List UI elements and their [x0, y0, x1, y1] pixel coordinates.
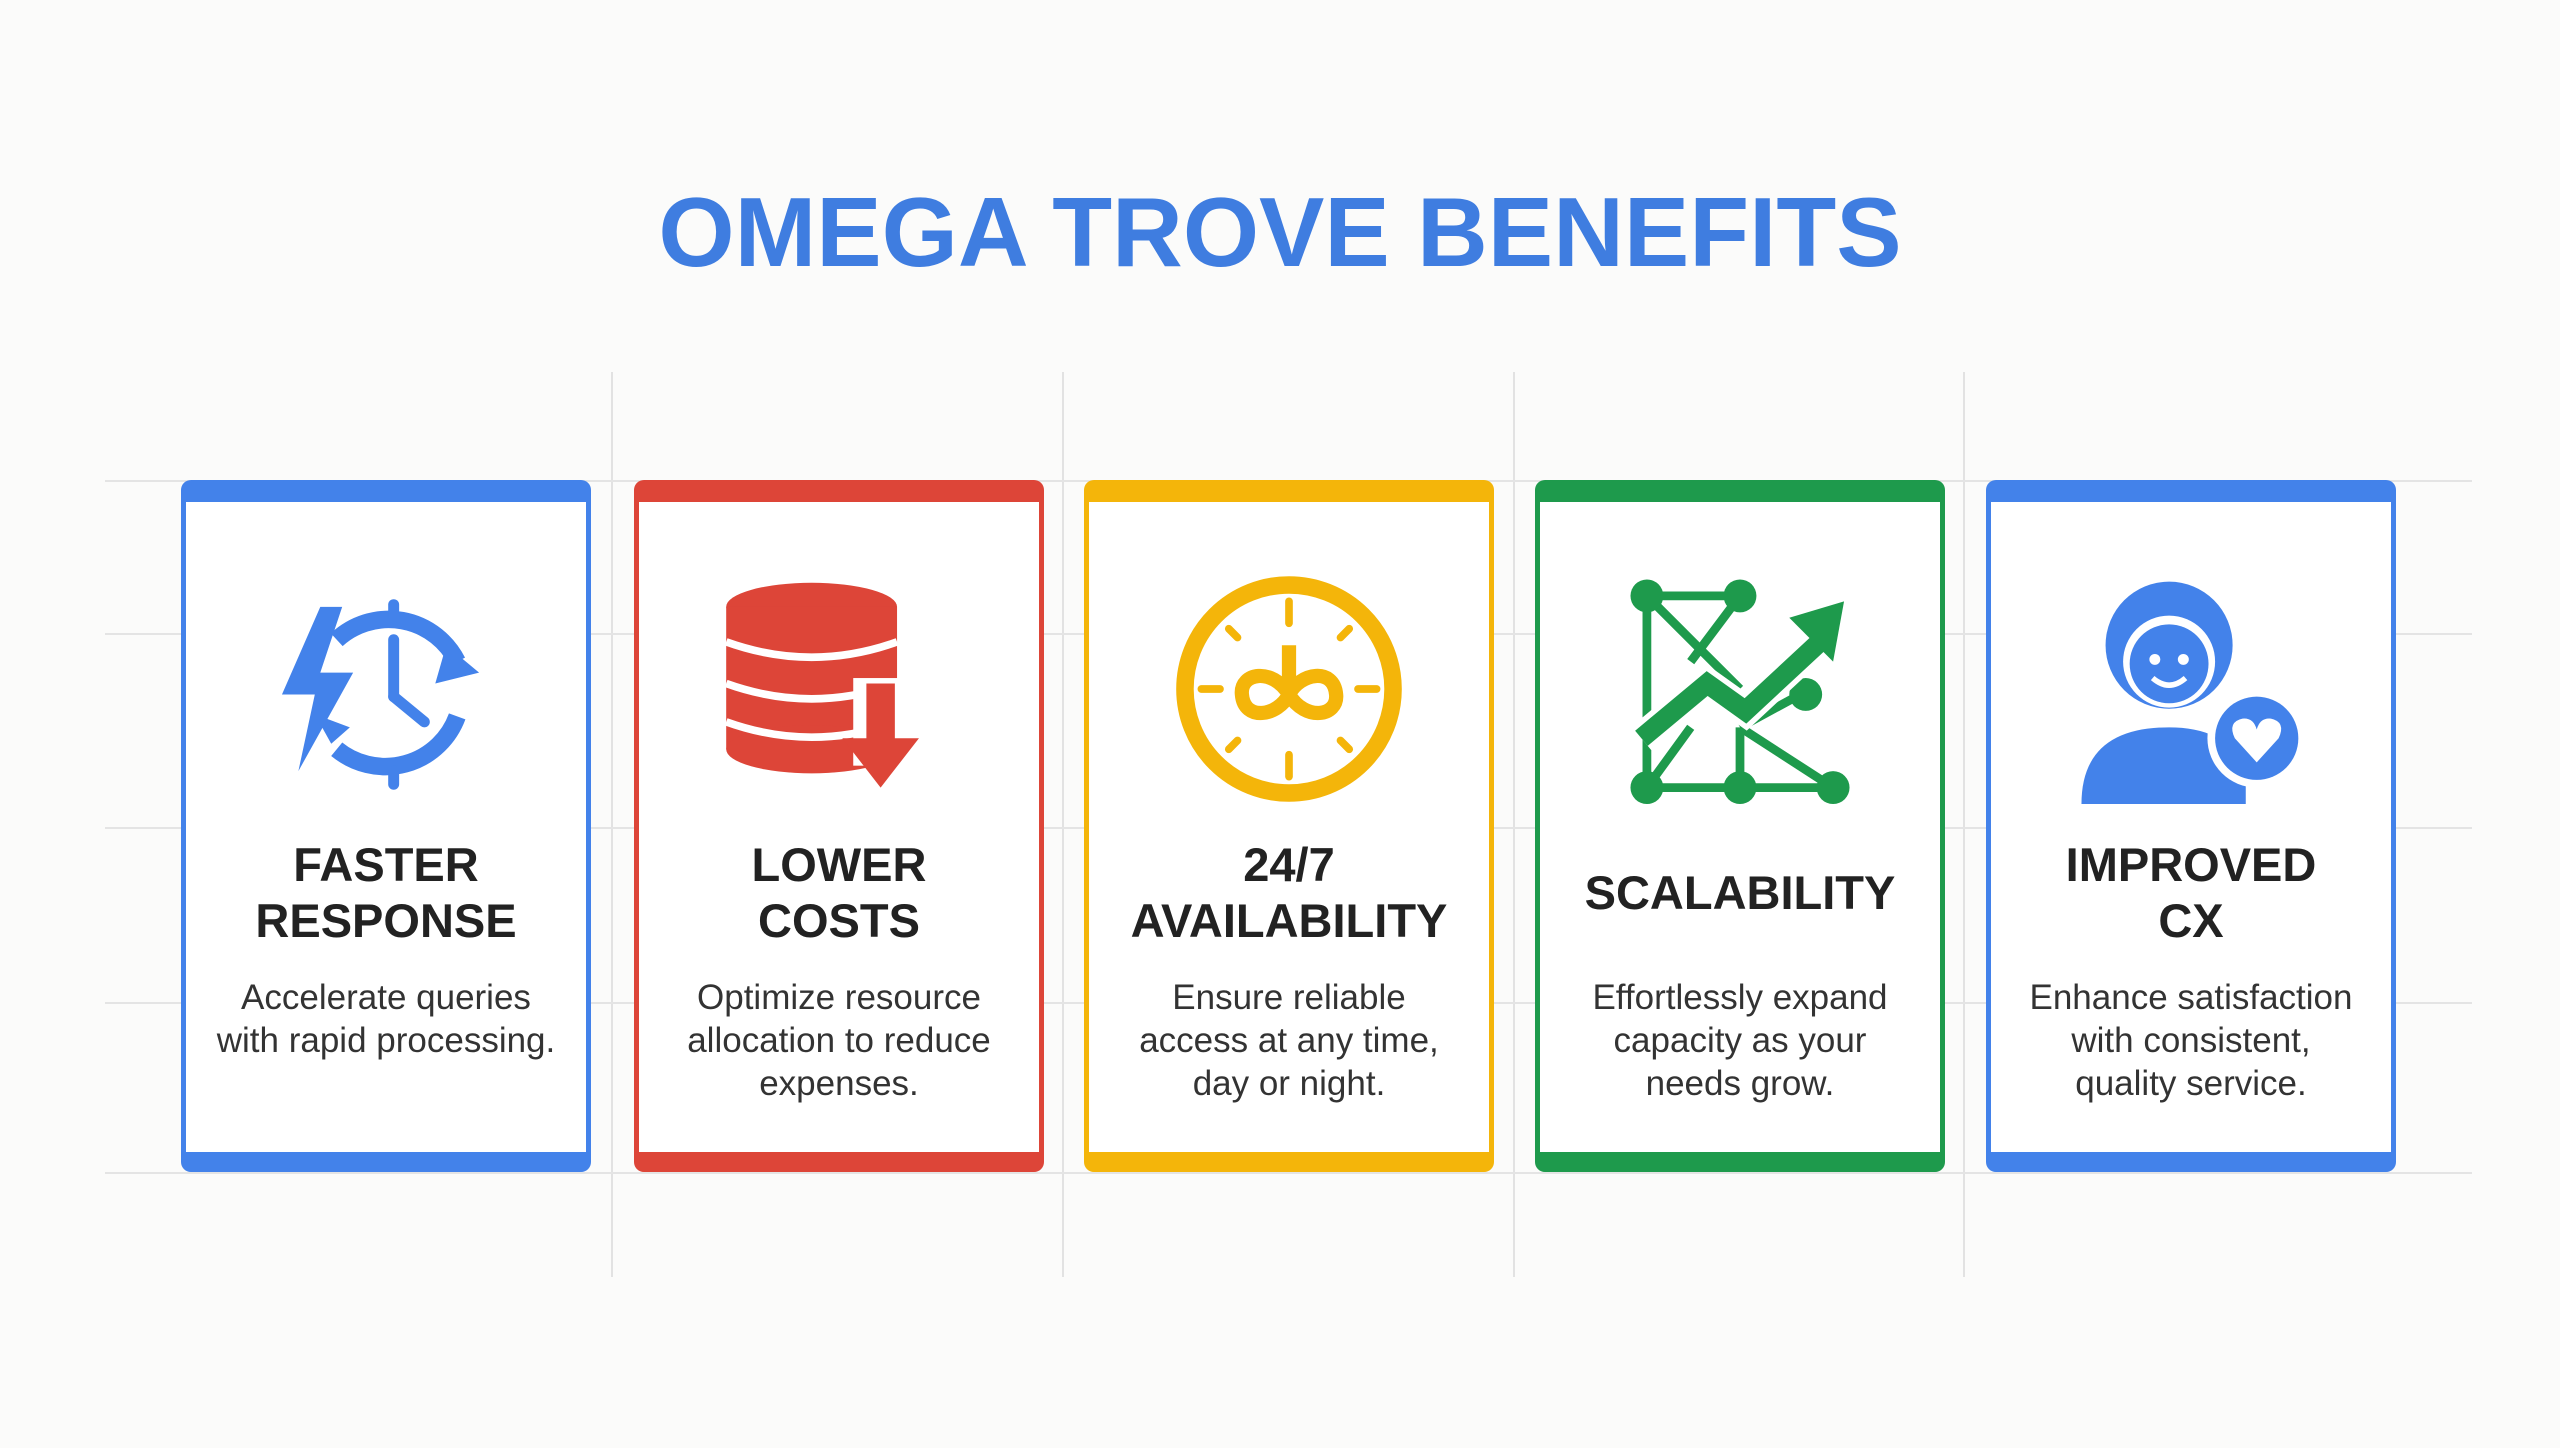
icon: network growth [1630, 580, 1850, 804]
panel: availability: Ensure reliable [1172, 978, 1406, 1017]
panel: improved cx: quality service. [2075, 1064, 2307, 1103]
panel: lower costs: LOWER [752, 838, 926, 891]
text: with rapid processing. [217, 1021, 555, 1060]
panel: availability [1084, 480, 1494, 1172]
panel: scalability: capacity as your [1614, 1021, 1866, 1060]
panel: lower costs: expenses. [759, 1064, 919, 1103]
panel: availability: 24/7 [1243, 838, 1335, 891]
text: Accelerate queries [241, 978, 531, 1017]
panel: scalability [1535, 480, 1945, 1172]
heading [255, 838, 517, 947]
icon: person with heart [2081, 582, 2298, 804]
icon: clock with lightning [282, 599, 479, 790]
panel: improved cx: with consistent, [2071, 1021, 2311, 1060]
panel: lower costs: Optimize resource [697, 978, 981, 1017]
panel: improved cx: Enhance satisfaction [2030, 978, 2352, 1017]
panel: availability: AVAILABILITY [1131, 894, 1447, 947]
panel: scalability: needs grow. [1646, 1064, 1834, 1103]
panel: lower costs [634, 480, 1044, 1172]
panel: improved cx: CX [2158, 894, 2224, 947]
panel: availability: day or night. [1193, 1064, 1385, 1103]
panel: faster response [181, 480, 591, 1172]
text [216, 978, 555, 1060]
icon: infinity clock [1176, 576, 1402, 802]
panel: improved cx: IMPROVED [2066, 838, 2316, 891]
heading: FASTER [293, 838, 479, 891]
panel: availability: access at any time, [1139, 1021, 1439, 1060]
panel: improved cx [1986, 480, 2396, 1172]
heading: RESPONSE [255, 894, 517, 947]
panel: lower costs: COSTS [758, 894, 920, 947]
panel: scalability: SCALABILITY [1585, 866, 1895, 919]
icon: database down arrow [726, 582, 919, 788]
panel: lower costs: allocation to reduce [687, 1021, 991, 1060]
title: OMEGA TROVE BENEFITS [658, 177, 1902, 287]
panel: scalability: Effortlessly expand [1592, 978, 1888, 1017]
